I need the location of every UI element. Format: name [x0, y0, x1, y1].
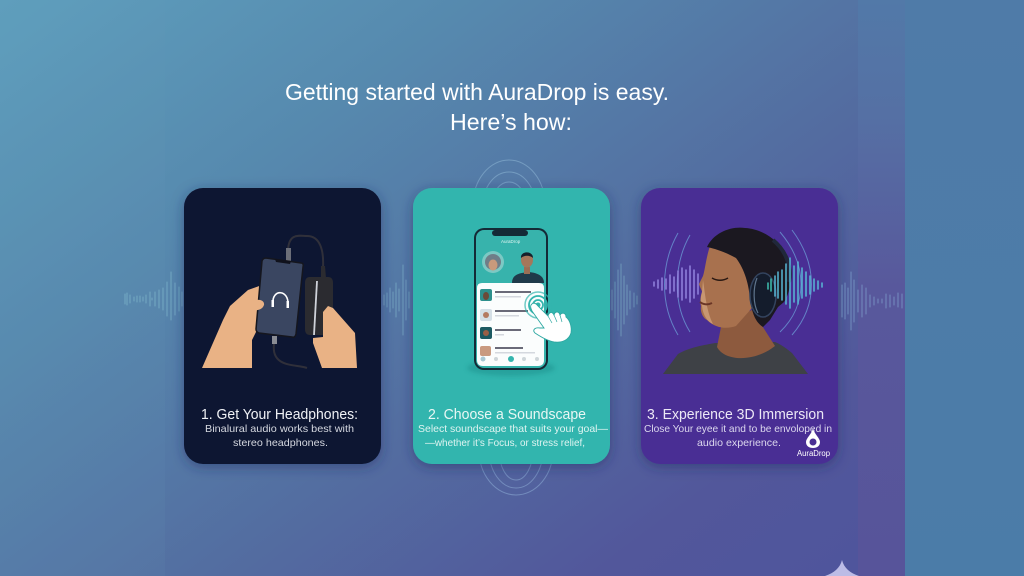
- waveform left: [654, 266, 698, 302]
- heading: 3. Experience 3D Immersion: [647, 407, 824, 423]
- icon: right hand: [313, 306, 357, 368]
- heading: 1. Get Your Headphones:: [201, 407, 358, 423]
- sound arcs below card 2: [479, 405, 553, 495]
- icon: smartphone: AuraDrop: [501, 239, 521, 244]
- avatar left: [482, 251, 504, 273]
- waveform: between cards 1 and 2: [384, 265, 409, 335]
- icon: headphone cable top: [288, 236, 323, 268]
- panel: step 1 get headphones: [184, 188, 381, 464]
- waveform: right: [842, 272, 902, 330]
- waveform right: [768, 258, 822, 308]
- heading: 2. Choose a Soundscape: [428, 407, 586, 423]
- icon: earcup: [305, 266, 333, 335]
- phone shadow: [467, 360, 555, 376]
- tab bar: [480, 356, 539, 362]
- icon: pointing hand: [531, 303, 571, 342]
- body text: audio experience.: [697, 437, 781, 449]
- headphone band: [773, 240, 790, 282]
- illustration: woman with headphones: [663, 228, 808, 374]
- body text: Select soundscape that suits your goal—: [418, 423, 608, 435]
- body text: [644, 423, 832, 449]
- waveform: between cards 2 and 3: [612, 264, 637, 336]
- body text: stereo headphones.: [233, 437, 328, 449]
- logo: AuraDrop: AuraDrop: [797, 449, 831, 458]
- waveform: left: [125, 272, 182, 320]
- face details: [712, 278, 728, 280]
- icon: left thumb: [248, 300, 264, 310]
- title: Getting started with AuraDrop is easy.: [285, 79, 669, 105]
- body text: [205, 423, 354, 449]
- sound arcs above card 2: [473, 160, 545, 250]
- body text: Close Your eyee it and to be envoloped in: [644, 423, 832, 435]
- avatar right: [512, 252, 544, 283]
- headphone cup: [750, 273, 776, 317]
- body text: Binalural audio works best with: [205, 423, 354, 435]
- logo: AuraDrop: [797, 428, 831, 458]
- body text: [418, 423, 608, 449]
- title: Here’s how:: [450, 109, 572, 135]
- icon: smartphone: [474, 228, 548, 370]
- icon: headphones glyph: [272, 293, 289, 308]
- icon: left hand holding phone: [202, 285, 262, 368]
- icon: headphone cable bottom: [274, 344, 307, 368]
- list rows: [480, 289, 535, 356]
- decorative star at the bottom: [825, 560, 859, 576]
- panel: step 2 choose a soundscape: [413, 188, 610, 464]
- list sheet: [477, 283, 544, 366]
- icon: phone: [256, 258, 303, 344]
- title: [285, 79, 669, 135]
- body text: —whether it’s Focus, or stress relief,: [425, 437, 585, 449]
- panel: step 3 experience 3D immersion: [641, 188, 838, 464]
- icon: tap ripple: [525, 292, 551, 318]
- sound arcs: [664, 230, 812, 335]
- icon: plug: [286, 248, 291, 261]
